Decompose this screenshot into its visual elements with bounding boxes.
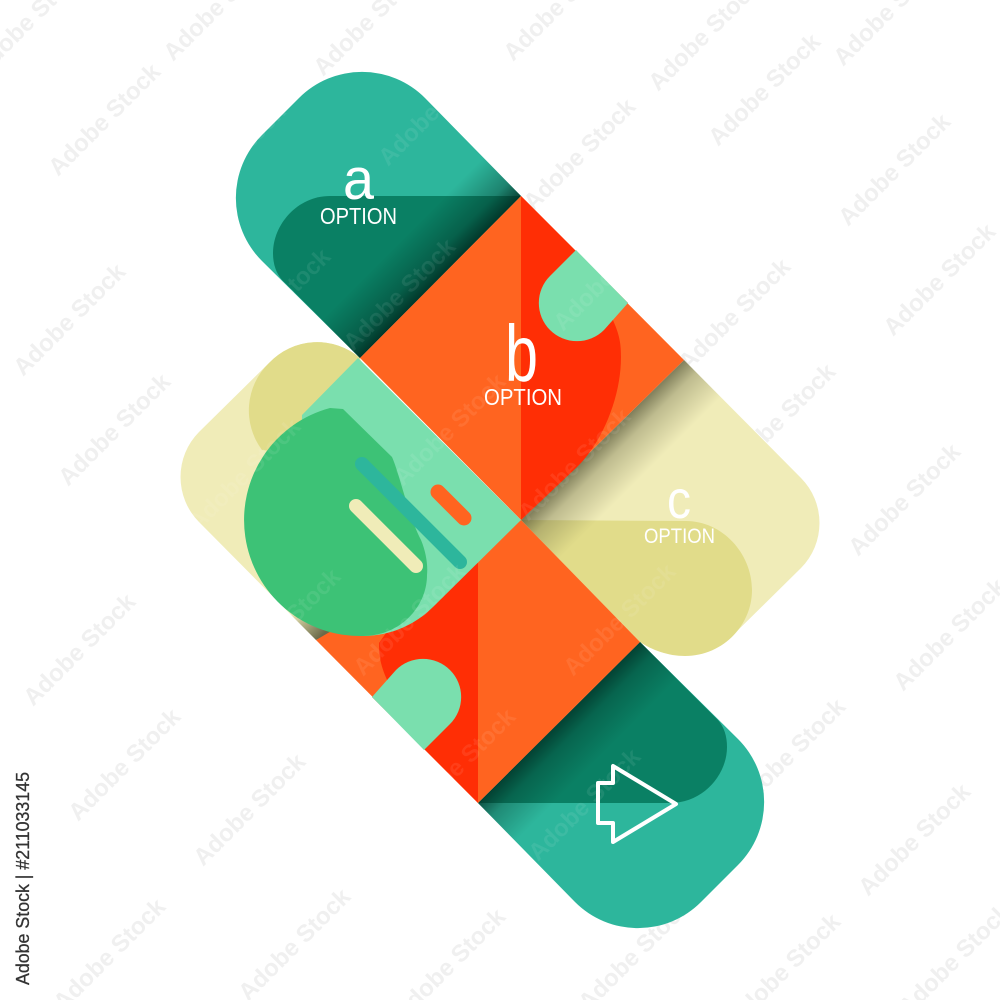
bar: teal <box>362 464 460 562</box>
watermark: Adobe Stock pattern: Adobe Stock <box>703 28 827 151</box>
mint tab <box>539 250 628 341</box>
watermark: overlay on shapes: Adobe Stock <box>348 558 472 681</box>
watermark: Adobe Stock pattern: Adobe Stock <box>718 358 842 481</box>
panel: green blob <box>244 408 427 636</box>
watermark: Adobe Stock pattern: Adobe Stock <box>853 778 977 901</box>
panel: left khaki pill <box>181 342 420 640</box>
watermark: Adobe Stock pattern: Adobe Stock <box>878 218 1000 341</box>
label: option a: a <box>343 147 375 212</box>
mint tab <box>372 659 461 750</box>
label: option b <box>484 309 562 410</box>
panel: arrow teal pill <box>478 642 764 928</box>
bar: orange <box>438 492 464 518</box>
panel: mint square <box>300 358 521 636</box>
red fold <box>372 563 478 803</box>
stock id caption: Adobe Stock | #211033145 <box>12 772 33 985</box>
watermark: overlay on shapes: Adobe Stock <box>388 368 512 491</box>
icon: outline arrow <box>598 766 676 842</box>
watermark: overlay on shapes: Adobe Stock <box>558 558 682 681</box>
label: option a <box>320 147 397 229</box>
bar: khaki <box>356 506 416 566</box>
watermark: Adobe Stock pattern: Adobe Stock <box>673 253 797 376</box>
watermark: Adobe Stock pattern: Adobe Stock <box>188 748 312 871</box>
label: option b: b <box>505 309 538 398</box>
watermark: overlay on shapes: Adobe Stock <box>168 98 292 221</box>
watermark: Adobe Stock pattern: Adobe Stock <box>728 693 852 816</box>
watermark: overlay on shapes: Adobe Stock <box>183 413 307 536</box>
watermark: overlay on shapes: Adobe Stock <box>548 213 672 336</box>
watermark: overlay on shapes <box>168 48 682 866</box>
watermark: Adobe Stock pattern: Adobe Stock <box>8 258 132 381</box>
watermark: Adobe Stock pattern: Adobe Stock <box>53 368 177 491</box>
red fold <box>521 196 628 520</box>
label: option c: OPTION <box>644 525 715 548</box>
label: option b: OPTION <box>484 384 562 410</box>
watermark: overlay on shapes: Adobe Stock <box>373 48 497 171</box>
watermark: Adobe Stock pattern: Adobe Stock <box>63 703 187 826</box>
label: option a: OPTION <box>320 203 397 229</box>
panel: option c khaki pill <box>521 360 819 656</box>
label: option c <box>644 470 715 548</box>
panel: lower orange diamond <box>316 520 640 803</box>
watermark: overlay on shapes: Adobe Stock <box>398 703 522 826</box>
watermark: Adobe Stock pattern: Adobe Stock <box>518 93 642 216</box>
watermark: Adobe Stock pattern: Adobe Stock <box>843 438 967 561</box>
watermark: overlay on shapes: Adobe Stock <box>523 743 647 866</box>
watermark: Adobe Stock pattern: Adobe Stock <box>43 58 167 181</box>
watermark: Adobe Stock pattern: Adobe Stock <box>833 108 957 231</box>
watermark: overlay on shapes: Adobe Stock <box>338 233 462 356</box>
watermark: Adobe Stock pattern: Adobe Stock <box>18 588 142 711</box>
panel: option b orange diamond <box>360 196 684 520</box>
watermark: overlay on shapes: Adobe Stock <box>513 403 637 526</box>
label: option c: c <box>667 470 691 530</box>
watermark: overlay on shapes: Adobe Stock <box>223 563 347 686</box>
panel: option a teal pill <box>236 72 521 358</box>
watermark: overlay on shapes: Adobe Stock <box>213 243 337 366</box>
